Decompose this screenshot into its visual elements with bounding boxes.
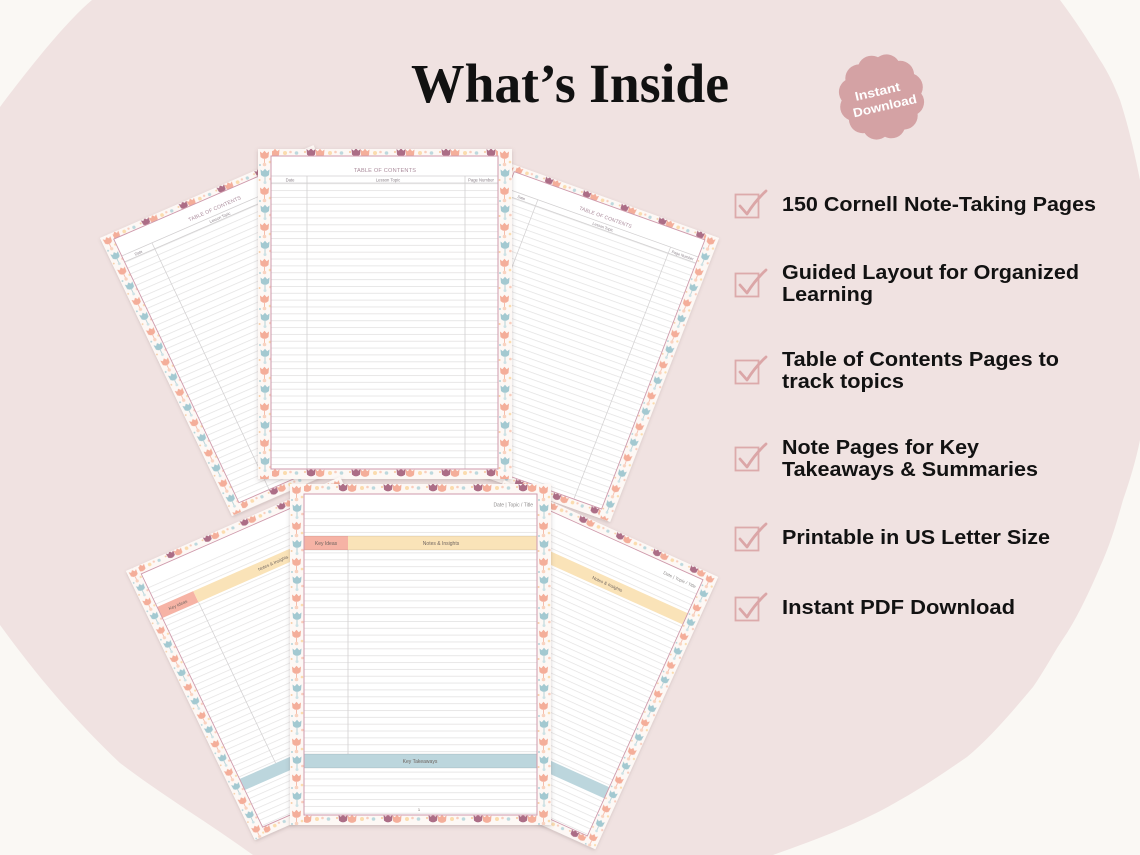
header labels: Date | Topic / Title (493, 502, 533, 508)
item: 150 pages: 150 Cornell Note-Taking Pages (782, 193, 1096, 216)
item: printable: Printable in US Letter Size (782, 526, 1050, 549)
header labels (315, 502, 533, 812)
key ideas band (157, 591, 199, 618)
header labels: Notes & Insights (257, 554, 290, 572)
page: table of contents, tilted right (397, 162, 719, 522)
item: note pages: Takeaways & Summaries (782, 458, 1038, 481)
column headers: Lesson Topic (592, 222, 614, 233)
title: What’s Inside (411, 53, 729, 114)
item: table of contents: Table of Contents Pages to (782, 348, 1059, 371)
column headers (517, 195, 695, 262)
header labels: Key Ideas (168, 598, 189, 611)
header labels: Notes & Insights (423, 541, 460, 547)
header labels: Key Takeaways (496, 741, 527, 759)
page: cornell notes, tilted left (126, 477, 469, 840)
item: instant download: Instant PDF Download (782, 596, 1015, 619)
takeaways band (240, 695, 436, 790)
takeaways band (304, 754, 537, 768)
column headers (134, 175, 312, 257)
column headers: Date (286, 178, 295, 182)
key ideas band (492, 527, 533, 555)
column headers: Date (134, 249, 143, 257)
contents heading: TABLE OF CONTENTS (578, 206, 633, 230)
badge: Instant Download: Download (852, 92, 918, 120)
page: cornell notes, centre (290, 484, 551, 825)
item: note pages: Note Pages for Key (782, 436, 980, 459)
column headers: Page Number (288, 175, 312, 190)
notes band (348, 536, 537, 550)
header labels: Key Ideas (315, 541, 338, 547)
header labels (424, 504, 697, 794)
badge: Instant Download (839, 54, 924, 140)
contents heading: TABLE OF CONTENTS (188, 195, 243, 223)
notes band (193, 523, 353, 602)
item: table of contents: track topics (782, 370, 904, 393)
header labels: Key Ideas (502, 535, 523, 548)
item: guided layout: Learning (782, 283, 873, 306)
column headers: Page Number (468, 178, 495, 182)
contents heading: TABLE OF CONTENTS (354, 168, 416, 174)
badge: Instant Download: Instant (854, 80, 902, 104)
page: cornell notes, tilted right (381, 480, 718, 849)
item: guided layout (736, 261, 1079, 306)
header labels: Notes & Insights (591, 575, 624, 593)
header labels: Key Takeaways (322, 734, 353, 751)
takeaways band (413, 701, 609, 798)
item: note pages (736, 436, 1038, 481)
column headers (286, 178, 495, 182)
item: instant download (736, 594, 1015, 620)
page: table of contents, centre (258, 149, 512, 479)
item: table of contents (736, 348, 1059, 393)
page: table of contents, tilted left (100, 145, 445, 516)
column headers: Lesson Topic (376, 178, 400, 182)
header labels: Key Takeaways (403, 759, 438, 765)
key ideas band (304, 536, 348, 550)
header labels: Date | Topic / Title (663, 570, 697, 589)
column headers: Date (517, 195, 526, 201)
header labels: 1 (418, 807, 421, 812)
header labels: Date | Topic / Title (300, 497, 335, 516)
column headers: Page Number (671, 250, 695, 262)
feature list (736, 191, 1096, 620)
column headers: Lesson Topic (209, 211, 231, 224)
item: guided layout: Guided Layout for Organized (782, 261, 1079, 284)
notes band (528, 543, 688, 624)
header labels (153, 497, 432, 783)
